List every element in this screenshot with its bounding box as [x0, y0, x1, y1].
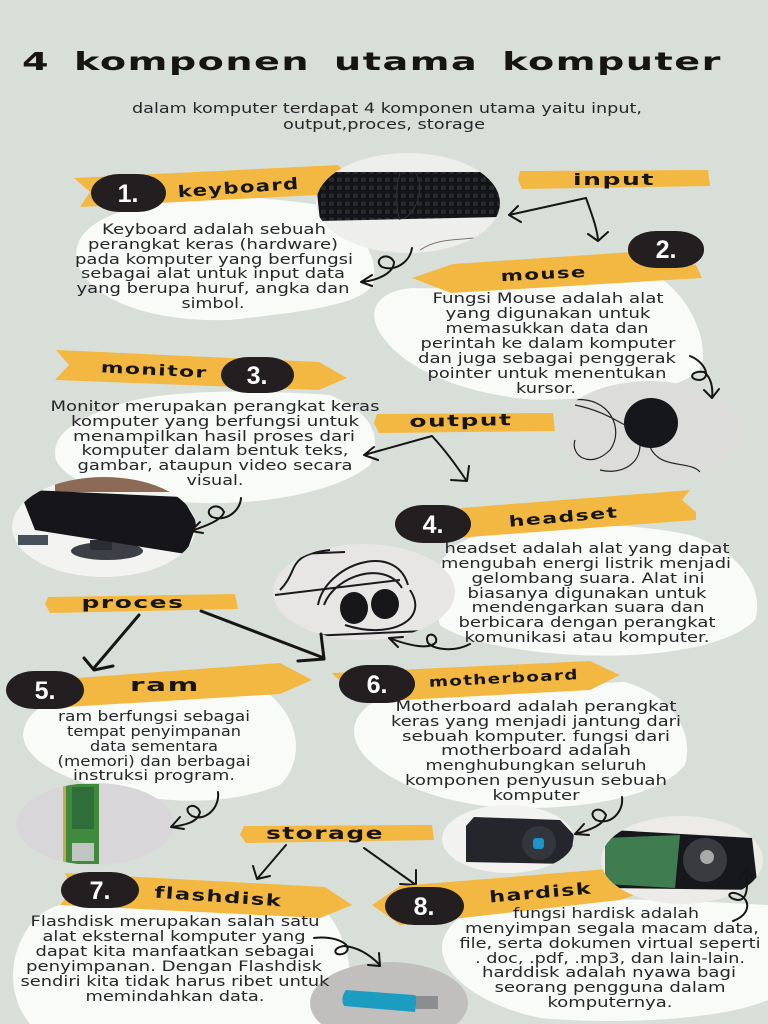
section 4: headset	[6, 490, 768, 1024]
ribbon: motherboard	[332, 661, 620, 702]
white blob: ram	[23, 692, 296, 801]
body: headset: komunikasi atau komputer.	[464, 630, 710, 646]
arrows: proces	[84, 615, 139, 670]
photo: headset	[273, 544, 455, 640]
ribbon: ram	[50, 663, 312, 708]
banner: storage: storage	[266, 824, 384, 844]
white blob: motherboard	[354, 682, 687, 808]
body: keyboard: Keyboard adalah sebuah	[102, 222, 326, 238]
body: mouse	[418, 291, 677, 397]
arrows: storage	[253, 845, 416, 885]
title: 4 komponen utama komputer	[22, 47, 722, 76]
number badge 2	[628, 231, 704, 268]
body: flashdisk: Flashdisk merupakan salah satu	[30, 914, 320, 930]
white blob: hardisk	[442, 899, 768, 1021]
body: flashdisk: memindahkan data.	[86, 989, 264, 1005]
body: monitor: Monitor merupakan perangkat keras	[50, 399, 380, 415]
body: mouse: dan juga sebagai penggerak	[418, 351, 677, 367]
banner: input: input	[573, 170, 655, 189]
white blob: headset	[434, 525, 757, 656]
heading: hardisk: hardisk	[488, 879, 593, 906]
ribbon: flashdisk	[60, 873, 352, 918]
body: monitor	[50, 399, 380, 489]
heading: monitor: monitor	[100, 358, 208, 382]
body: motherboard: komputer	[492, 788, 580, 804]
body: flashdisk: penyimpanan. Dengan Flashdisk	[26, 959, 323, 975]
section 5: ram	[6, 661, 768, 1024]
section 1: keyboard	[74, 150, 510, 320]
body: hardisk: . doc, .pdf, .mp3, dan lain-lain.	[475, 951, 745, 967]
body: ram: ram berfungsi sebagai	[58, 709, 250, 725]
number badge 1	[91, 174, 166, 212]
heading: flashdisk: flashdisk	[154, 883, 283, 910]
subtitle: dalam komputer terdapat 4 komponen utama yaitu input,	[132, 101, 642, 117]
number badge 8: 8.	[414, 893, 434, 921]
arrow: keyboard	[361, 248, 412, 286]
photo: motherboard	[442, 805, 574, 873]
body: headset: gelombang suara. Alat ini	[472, 571, 704, 587]
heading: mouse: mouse	[500, 263, 587, 285]
subtitle: output,proces, storage	[283, 117, 485, 133]
body: hardisk: komputernya.	[548, 995, 672, 1011]
photo: hardisk	[600, 815, 765, 905]
body: headset: mendengarkan suara dan	[472, 600, 704, 616]
body: ram: tempat penyimpanan	[67, 724, 241, 740]
body: hardisk: fungsi hardisk adalah	[513, 906, 699, 922]
photo: keyboard	[316, 153, 500, 253]
heading: headset: headset	[508, 503, 619, 531]
arrow: motherboard	[575, 797, 622, 835]
body: ram: instruksi program.	[73, 768, 235, 784]
body: motherboard: menghubungkan seluruh	[426, 758, 646, 774]
body: motherboard	[391, 699, 681, 804]
white blob: monitor	[55, 392, 375, 503]
body: headset	[441, 541, 731, 646]
body: hardisk: file, serta dokumen virtual seperti	[460, 936, 760, 952]
banner: proces	[45, 593, 238, 613]
body: mouse: memasukkan data dan	[446, 321, 648, 337]
body: mouse: kursor.	[516, 381, 576, 397]
ribbon: monitor	[55, 350, 347, 390]
arrows: output	[364, 436, 469, 481]
body: motherboard: motherboard adalah	[441, 743, 631, 759]
body: monitor: komputer yang berfungsi untuk	[71, 414, 360, 430]
body: hardisk: menyimpan segala macam data,	[465, 921, 759, 937]
body: mouse: pointer untuk menentukan	[428, 366, 666, 382]
number badge 6	[339, 665, 415, 703]
body: monitor: menampilkan hasil proses dari	[73, 429, 355, 445]
body: flashdisk	[20, 914, 331, 1005]
banner: storage	[240, 824, 434, 844]
white blob: keyboard	[76, 196, 374, 320]
body: flashdisk: sendiri kita tidak harus ribet untuk	[20, 974, 331, 990]
body: monitor: visual.	[186, 473, 244, 489]
body: headset: berbicara dengan perangkat	[458, 615, 716, 631]
section 3: monitor	[6, 350, 768, 1024]
body: flashdisk: dapat kita manfaatkan sebagai	[36, 944, 314, 960]
body: headset: mengubah energi listrik menjadi	[441, 556, 731, 572]
body: ram: (memori) dan berbagai	[58, 754, 250, 770]
body: ram	[58, 709, 250, 784]
arrow: headset	[389, 635, 470, 649]
section 6: motherboard	[13, 661, 768, 1024]
number badge 5: 5.	[35, 677, 55, 705]
body: ram: data sementara	[90, 739, 218, 755]
banner: output	[374, 410, 555, 433]
arrow: hardisk	[729, 869, 752, 921]
arrow: flashdisk	[314, 937, 380, 966]
photo: monitor	[10, 475, 200, 580]
banner: output: output	[409, 410, 513, 431]
number badge 7	[61, 872, 139, 908]
body: mouse: Fungsi Mouse adalah alat	[432, 291, 664, 307]
ribbon: keyboard	[74, 165, 345, 207]
number badge 1: 1.	[118, 180, 138, 208]
number badge 3: 3.	[247, 362, 267, 390]
body: hardisk	[460, 906, 760, 1011]
arrow: mouse	[690, 356, 719, 398]
banner: input	[518, 170, 710, 189]
number badge 5	[6, 671, 84, 709]
photo: ram	[16, 783, 174, 865]
body: headset: biasanya digunakan untuk	[468, 586, 708, 602]
heading: motherboard: motherboard	[428, 667, 579, 691]
number badge 2: 2.	[656, 236, 676, 264]
body: motherboard: sebuah komputer. fungsi dari	[402, 729, 670, 745]
heading: ram: ram	[130, 675, 200, 696]
body: keyboard: yang berupa huruf, angka dan	[76, 281, 350, 297]
heading: keyboard: keyboard	[177, 174, 300, 201]
number badge 4: 4.	[423, 511, 443, 539]
arrow: ram	[171, 792, 218, 829]
body: mouse: perintah ke dalam komputer	[420, 336, 676, 352]
number badge 8	[385, 887, 464, 925]
body: flashdisk: alat eksternal komputer yang	[42, 929, 306, 945]
photo: flashdisk	[305, 960, 475, 1024]
body: motherboard: Motherboard adalah perangkat	[396, 699, 677, 715]
body: keyboard	[75, 222, 353, 312]
body: hardisk: harddisk adalah nyawa bagi	[482, 965, 736, 981]
ribbon: headset	[456, 490, 696, 538]
section 7: flashdisk	[13, 815, 768, 1024]
body: headset: headset adalah alat yang dapat	[444, 541, 730, 557]
arrow: monitor	[191, 498, 241, 533]
subtitle	[132, 101, 642, 133]
body: keyboard: simbol.	[182, 296, 244, 312]
body: hardisk: seorang pengguna dalam	[494, 980, 726, 996]
body: mouse: yang digunakan untuk	[446, 306, 652, 322]
white blob: mouse	[374, 275, 703, 400]
section 8: hardisk	[372, 815, 768, 1021]
number badge 6: 6.	[367, 671, 387, 699]
banner: proces: proces	[82, 593, 184, 612]
number badge 4	[395, 505, 471, 543]
ribbon: mouse	[412, 252, 702, 293]
white blob: flashdisk	[13, 903, 352, 1024]
body: monitor: gambar, ataupun video secara	[78, 458, 352, 474]
ribbon: hardisk	[372, 868, 650, 925]
number badge 3	[221, 357, 294, 393]
number badge 7: 7.	[90, 877, 110, 905]
body: motherboard: komponen penyusun sebuah	[405, 773, 667, 789]
arrow: proces to motherboard	[201, 611, 324, 661]
section 2: mouse	[6, 231, 768, 1024]
body: keyboard: sebagai alat untuk input data	[81, 266, 345, 282]
body: keyboard: perangkat keras (hardware)	[88, 237, 338, 253]
body: motherboard: keras yang menjadi jantung dari	[391, 714, 681, 730]
photo: mouse	[574, 381, 700, 472]
arrows: input	[509, 198, 608, 241]
body: monitor: komputer dalam bentuk teks,	[82, 443, 348, 459]
body: keyboard: pada komputer yang berfungsi	[75, 252, 353, 268]
